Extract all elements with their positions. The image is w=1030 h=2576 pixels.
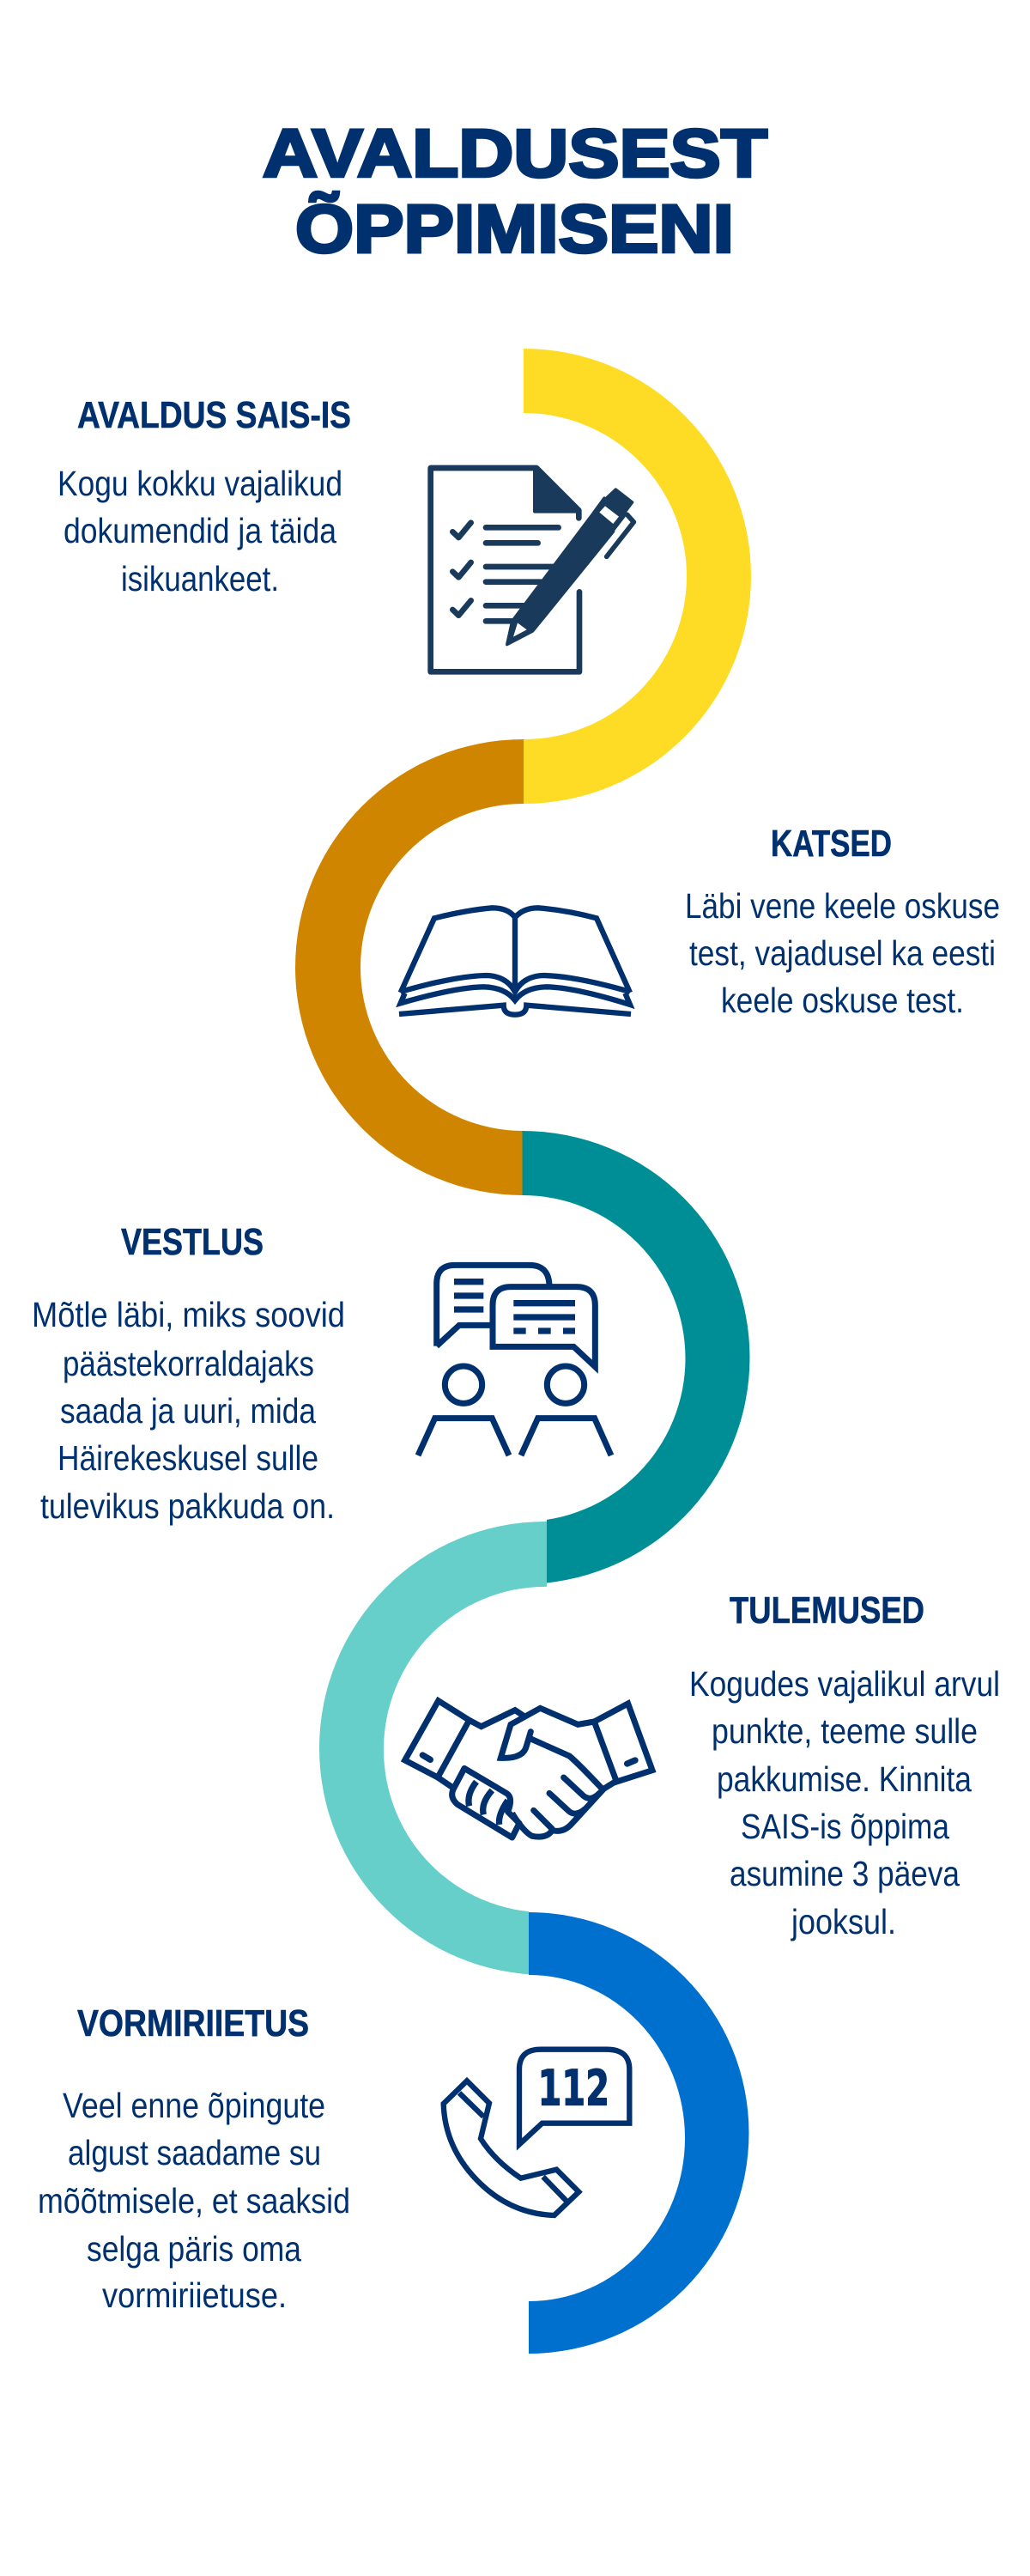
title <box>263 115 767 266</box>
title: AVALDUSEST <box>263 115 767 191</box>
arc: teal <box>522 1131 750 1583</box>
text: vormiriietus description: mõõtmisele, et saaksid <box>38 2181 350 2221</box>
text: vormiriietus description: vormiriietuse. <box>102 2275 287 2315</box>
text: tulemused description: SAIS-is õppima <box>741 1807 949 1846</box>
text: vormiriietus description: selga päris oma <box>87 2229 301 2269</box>
text: tulemused description: pakkumise. Kinnita <box>717 1759 972 1799</box>
icon: two people talking <box>418 1265 611 1455</box>
title: ÕPPIMISENI <box>295 191 734 266</box>
panel: step 5 vormiriietus <box>38 1912 749 2354</box>
panel: step 3 vestlus <box>32 1131 750 1584</box>
icon: open book <box>399 908 631 1015</box>
text: vormiriietus description: algust saadame su <box>68 2133 321 2172</box>
text: vestlus description: tulevikus pakkuda on. <box>40 1486 335 1526</box>
text: tulemused description <box>689 1664 1000 1941</box>
heading: katsed: KATSED <box>771 823 892 865</box>
text: vestlus description: päästekorraldajaks <box>63 1344 314 1383</box>
heading: vormiriietus: VORMIRIIETUS <box>77 2002 309 2044</box>
heading: tulemused: TULEMUSED <box>730 1589 924 1631</box>
text: vormiriietus description <box>38 2086 350 2315</box>
text: vestlus description: saada ja uuri, mida <box>60 1391 316 1431</box>
text: vestlus description: Häirekeskusel sulle <box>58 1438 318 1478</box>
text: vormiriietus description: Veel enne õpingute <box>63 2086 325 2125</box>
text: tulemused description: asumine 3 päeva <box>730 1854 960 1893</box>
text: avaldus description <box>58 464 342 598</box>
text: katsed description: keele oskuse test. <box>721 981 964 1020</box>
heading: avaldus sais-is: AVALDUS SAIS-IS <box>77 394 351 436</box>
arc: blue <box>529 1912 748 2354</box>
panel: step 4 tulemused <box>319 1522 1000 1975</box>
text: avaldus description: isikuankeet. <box>121 559 279 598</box>
arc: light teal <box>319 1522 547 1975</box>
icon: phone with 112 bubble <box>444 2050 629 2215</box>
text: tulemused description: punkte, teeme sulle <box>712 1711 978 1751</box>
panel: step 2 katsed <box>295 739 1000 1195</box>
icon: phone with 112 bubble: 112 <box>538 2061 609 2117</box>
panel: step 1 avaldus <box>58 349 751 804</box>
text: avaldus description: dokumendid ja täida <box>64 511 336 550</box>
text: vestlus description <box>32 1295 345 1526</box>
heading: vestlus: VESTLUS <box>121 1221 264 1263</box>
icon: handshake <box>405 1701 652 1838</box>
text: tulemused description: jooksul. <box>791 1902 896 1941</box>
arc: yellow <box>524 349 751 804</box>
text: avaldus description: Kogu kokku vajalikud <box>58 464 342 503</box>
text: vestlus description: Mõtle läbi, miks soovid <box>32 1295 345 1334</box>
icon: document and pen <box>431 468 633 671</box>
text: katsed description <box>685 886 1000 1020</box>
arc: orange <box>295 739 524 1195</box>
